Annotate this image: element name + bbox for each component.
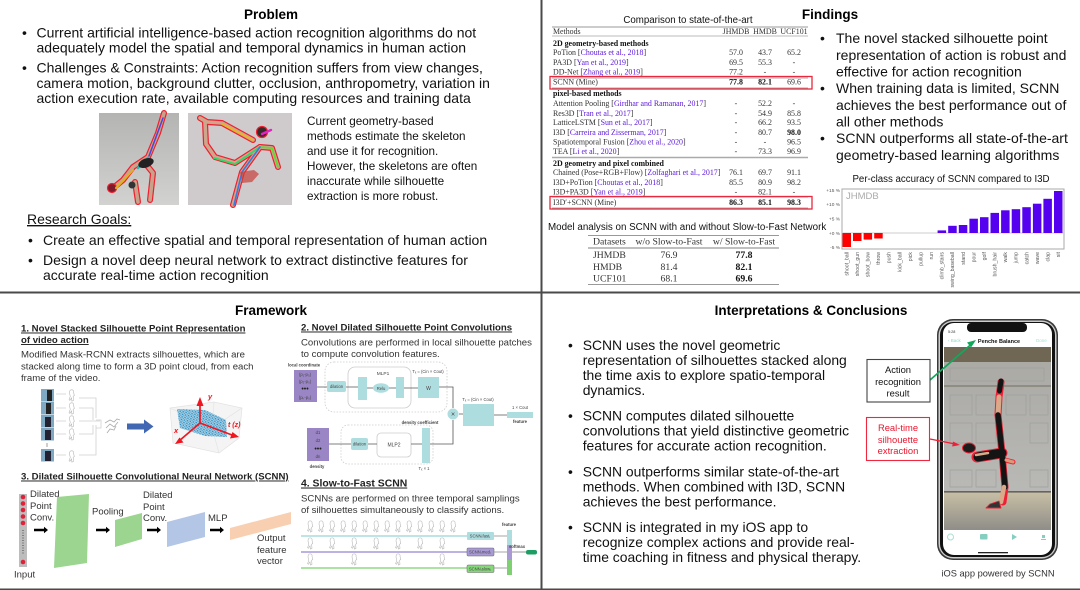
SCNN classifier blocks: feature	[502, 522, 517, 527]
section 4: slow-to-fast SCNN: of silhouettes simultaneously to classify actions.	[301, 505, 504, 516]
dancer with silhouette outline	[962, 381, 1013, 508]
bar chart: per-class accuracy: push	[887, 252, 893, 263]
highlight: SCNN row	[550, 76, 812, 89]
table: comparison to state-of-the-art: 80.9	[758, 178, 772, 187]
table: comparison to state-of-the-art: 96.9	[787, 147, 801, 156]
input points column: Input	[14, 570, 35, 580]
table: comparison to state-of-the-art: -	[735, 138, 738, 146]
convolution diagram: d2	[316, 438, 321, 443]
text block: conclusions bullets: SCNN outperforms similar state-of-the-art	[583, 464, 839, 480]
text block: skeleton note: extraction is more robust.	[307, 190, 438, 203]
text block: conclusions bullets: •	[568, 337, 573, 353]
section 3: SCNN architecture: Dilated	[30, 489, 60, 500]
section 3: SCNN architecture	[14, 472, 291, 580]
table: comparison to state-of-the-art: 93.5	[787, 118, 801, 127]
table: comparison to state-of-the-art: 80.7	[758, 128, 772, 137]
convolution diagram: density coefficient	[402, 420, 439, 425]
table: model analysis: 76.9	[661, 250, 678, 261]
convolution diagram	[288, 362, 533, 471]
table: comparison to state-of-the-art: 98.0	[787, 128, 801, 137]
phone header: Done	[1036, 338, 1047, 343]
text block: skeleton note	[307, 115, 477, 203]
bar chart: per-class accuracy: walk	[1003, 252, 1009, 262]
caption: iOS app: iOS app powered by SCNN	[941, 568, 1055, 578]
table: comparison to state-of-the-art: HMDB	[753, 27, 777, 36]
section 4: slow-to-fast SCNN: 4. Slow-to-Fast SCNN	[301, 478, 407, 490]
layer: dilated point conv 1	[54, 494, 89, 568]
text block: research goals bullets: •	[28, 252, 33, 268]
table: model analysis: Model analysis on SCNN with and without Slow-to-Fast Network	[548, 222, 826, 233]
heading: interpretations and conclusions: Interpretations & Conclusions	[715, 303, 907, 318]
section 3: SCNN architecture: MLP	[208, 513, 228, 524]
text block: research goals bullets: Design a novel deep neural network to extract distinctive features for	[43, 252, 468, 268]
convolution diagram: Tₓ = (Cin × Cout)	[412, 369, 444, 374]
text block: research goals bullets: Create an effective spatial and temporal representation of human action	[43, 232, 487, 248]
table: model analysis: HMDB	[593, 262, 622, 273]
arrow	[210, 527, 224, 533]
text block: skeleton note: Current geometry-based	[307, 115, 434, 128]
text block: problem bullets: •	[22, 24, 27, 40]
table: comparison to state-of-the-art: 91.1	[787, 168, 801, 177]
layer: pooling	[115, 513, 142, 547]
table: comparison to state-of-the-art: 76.1	[729, 168, 743, 177]
bar chart: per-class accuracy: pullup	[918, 252, 924, 266]
table: comparison to state-of-the-art: 82.1	[758, 78, 772, 86]
text block: conclusions bullets: •	[568, 464, 573, 480]
table: model analysis: w/o Slow-to-Fast	[635, 236, 703, 248]
table: comparison to state-of-the-art: 69.5	[729, 58, 743, 67]
table: comparison to state-of-the-art: I3D′+SCNN (Mine)	[553, 198, 617, 207]
arrow	[96, 527, 110, 533]
section 4: slow-to-fast SCNN: SCNNs are performed on three temporal samplings	[301, 494, 520, 504]
panel: interpretations and conclusions	[568, 303, 1058, 578]
table: comparison to state-of-the-art: -	[735, 99, 738, 108]
bar chart: per-class accuracy: shoot_ball	[844, 252, 850, 276]
image: gymnast silhouette 2	[188, 113, 292, 205]
text block: conclusions bullets: representation of silhouettes stacked along	[583, 352, 847, 368]
temporal stream: fast	[301, 521, 467, 536]
arrow: action recognition to header	[930, 340, 976, 380]
table: comparison to state-of-the-art: 96.5	[787, 138, 801, 146]
table: comparison to state-of-the-art: -	[735, 128, 738, 137]
table: comparison to state-of-the-art: 69.6	[787, 78, 801, 86]
table: comparison to state-of-the-art: Chained (Pose+RGB+Flow) [Zolfaghari et al., 2017]	[553, 168, 721, 177]
convolution diagram: dilation	[353, 442, 367, 446]
garage door photo	[944, 347, 1051, 530]
text block: conclusions bullets: the time axis to explore spatio-temporal	[583, 367, 825, 383]
bar chart: per-class accuracy: clap	[1045, 252, 1051, 262]
phone toolbar	[948, 534, 1046, 540]
convolution diagram: W	[426, 386, 431, 392]
bar chart: per-class accuracy: brush_hair	[992, 252, 998, 277]
convolution diagram: (pₖ-p₀)	[299, 395, 312, 400]
text block: findings bullets: The novel stacked silhouette point	[836, 30, 1048, 46]
table: comparison to state-of-the-art: -	[793, 99, 796, 108]
table: comparison to state-of-the-art: 2D geometry and pixel combined	[553, 159, 665, 168]
convolution diagram: Tₓ = (Cin × Cout)	[462, 397, 494, 402]
bar chart: per-class accuracy: -5 %	[830, 245, 841, 251]
table: comparison to state-of-the-art: -	[735, 188, 738, 196]
table: comparison to state-of-the-art: UCF101	[780, 27, 808, 36]
table: comparison to state-of-the-art: 86.3	[729, 198, 743, 207]
table: comparison to state-of-the-art: 98.2	[787, 178, 801, 187]
bar chart: per-class accuracy	[826, 174, 1064, 287]
arrow: silhouette extraction to dancer	[930, 439, 960, 446]
bar chart: per-class accuracy: sit	[1056, 251, 1062, 257]
chart: 3D point cloud	[170, 392, 242, 453]
bar chart: per-class accuracy: jump	[1014, 252, 1020, 264]
table: comparison to state-of-the-art: 98.3	[787, 198, 801, 207]
callout: action recognition result: Action	[885, 364, 911, 375]
table: model analysis: Datasets	[593, 236, 626, 248]
text block: findings bullets: •	[820, 30, 825, 46]
table: comparison to state-of-the-art: 54.9	[758, 109, 772, 118]
table: comparison to state-of-the-art: 66.2	[758, 118, 772, 127]
bar chart: per-class accuracy: JHMDB	[846, 191, 879, 202]
section 4: slow-to-fast SCNN	[301, 478, 537, 575]
table: comparison to state-of-the-art: -	[735, 118, 738, 127]
table: comparison to state-of-the-art: -	[764, 68, 767, 76]
table: comparison to state-of-the-art: 85.8	[787, 109, 801, 118]
section 3: SCNN architecture: Point	[30, 501, 52, 512]
table: comparison to state-of-the-art: 73.3	[758, 147, 772, 156]
section 1: stacked silhouette point representation: of video action	[21, 335, 89, 346]
bar chart: per-class accuracy: pick	[908, 252, 914, 261]
section 3: SCNN architecture: Output	[257, 533, 286, 544]
text block: findings bullets: effective for action recognition	[836, 64, 1022, 80]
text block: findings bullets	[820, 30, 1068, 163]
SCNN classifier blocks: SCNN₍med₎	[469, 550, 491, 554]
text block: skeleton note: inaccurate while silhouette	[307, 175, 444, 188]
image: gymnast silhouette 1	[99, 113, 179, 205]
phone header: Penche Balance	[978, 339, 1020, 345]
convolution diagram: density	[310, 464, 325, 469]
text block: problem bullets: Challenges & Constraints: Action recognition suffers from view changes,	[36, 60, 483, 76]
heading: problem: Problem	[244, 7, 298, 22]
section 2: dilated silhouette point convolutions: Convolutions are performed in local silhouette patches	[301, 338, 532, 348]
text block: conclusions bullets: SCNN is integrated in my iOS app to	[583, 519, 808, 535]
silhouette stacking flow	[56, 390, 120, 462]
highlight: I3D+SCNN row	[550, 196, 812, 209]
convolution diagram: •••	[314, 446, 322, 453]
table: comparison to state-of-the-art: 65.2	[787, 48, 801, 57]
convolution diagram: feature	[513, 419, 528, 424]
section 3: SCNN architecture: feature	[257, 545, 287, 556]
text block: findings bullets: all other methods	[836, 114, 943, 130]
table: comparison to state-of-the-art: -	[793, 188, 796, 196]
callout: action recognition result: recognition	[875, 376, 921, 387]
table: model analysis: w/ Slow-to-Fast	[713, 236, 775, 248]
text block: conclusions bullets: achieves the best performance.	[583, 494, 777, 510]
table: comparison to state-of-the-art: TEA [Li et al., 2020]	[553, 147, 620, 156]
table: comparison to state-of-the-art: 85.1	[758, 198, 772, 207]
text block: problem bullets: adequately model the spatial and temporal dynamics in human action	[36, 39, 466, 55]
bar chart: per-class accuracy: swing_baseball	[950, 252, 956, 287]
convolution diagram: Relu	[377, 386, 386, 391]
text block: findings bullets: •	[820, 130, 825, 146]
phone header: 5:28	[948, 330, 955, 334]
text block: skeleton note: However, the skeletons are often	[307, 160, 477, 173]
chart: 3D point cloud: t (z)	[228, 422, 241, 429]
section 2: dilated silhouette point convolutions: 2. Novel Dilated Silhouette Point Convolutions	[301, 322, 512, 334]
section 1: stacked silhouette point representation	[21, 324, 254, 462]
table: model analysis: 77.8	[736, 250, 753, 261]
table: model analysis	[548, 222, 826, 284]
text block: findings bullets: When training data is limited, SCNN	[836, 80, 1059, 96]
table: comparison to state-of-the-art: LatticeLSTM [Sun et al., 2017]	[553, 118, 653, 127]
video frames	[41, 389, 54, 462]
bar chart: per-class accuracy: +15 %	[826, 188, 841, 194]
table: model analysis: JHMDB	[593, 250, 626, 261]
phone header: ‹ Back	[948, 338, 962, 343]
text block: problem bullets: •	[22, 60, 27, 76]
section 2: dilated silhouette point convolutions	[288, 322, 533, 471]
text block: problem bullets: camera motion, background clutter, occlusion, anthropometry, variation in	[36, 75, 490, 91]
temporal stream: medium	[301, 538, 467, 552]
convolution diagram: dn	[316, 454, 321, 459]
convolution diagram: MLP2	[387, 442, 401, 448]
layer: dilated point conv 2	[167, 512, 205, 547]
chart: 3D point cloud: x	[173, 426, 179, 435]
callout: real-time silhouette extraction: extraction	[878, 445, 918, 456]
bar chart: per-class accuracy: shoot_bow	[866, 252, 872, 277]
convolution diagram: d1	[316, 430, 321, 435]
text block: findings bullets: geometry-based learning algorithms	[836, 147, 1059, 163]
table: comparison to state-of-the-art: PoTion [Choutas et al., 2018]	[553, 48, 646, 57]
bar chart: per-class accuracy: throw	[876, 252, 882, 265]
callout: action recognition result: result	[887, 388, 910, 398]
text block: conclusions bullets: •	[568, 519, 573, 535]
bar chart: per-class accuracy: run	[929, 252, 935, 260]
text block: findings bullets: SCNN outperforms all state-of-the-art	[836, 130, 1068, 146]
heading: findings: Findings	[802, 7, 858, 22]
convolution diagram: local coordinate	[288, 362, 321, 368]
section 3: SCNN architecture: 3. Dilated Silhouette Convolutional Neural Network (SCNN)	[21, 472, 289, 482]
section 3: SCNN architecture: Pooling	[92, 506, 124, 518]
bar chart: per-class accuracy: wave	[1035, 252, 1041, 264]
bar chart: per-class accuracy: pour	[971, 252, 977, 262]
convolution diagram: dilation	[330, 384, 344, 389]
table: comparison to state-of-the-art: Spatiotemporal Fusion [Zhou et al., 2020]	[553, 138, 686, 146]
bar chart: per-class accuracy: Per-class accuracy of SCNN compared to I3D	[852, 174, 1050, 185]
callout: real-time silhouette extraction	[866, 418, 930, 460]
table: comparison to state-of-the-art	[550, 15, 812, 209]
panel: problem	[22, 7, 490, 283]
text block: skeleton note: methods estimate the skeleton	[307, 130, 466, 143]
convolution diagram: Tₓ × 1	[418, 466, 430, 471]
arrow: to point cloud	[127, 420, 154, 434]
table: comparison to state-of-the-art: -	[764, 138, 767, 146]
section 1: stacked silhouette point representation: frame of the video.	[21, 373, 100, 384]
bar chart: per-class accuracy: golf	[982, 251, 988, 260]
text block: findings bullets: •	[820, 80, 825, 96]
phone header	[948, 330, 1047, 345]
temporal stream: slow	[301, 554, 467, 568]
callout: action recognition result	[867, 360, 930, 402]
text block: problem bullets: action execution rate, available computing resources and training data	[36, 90, 471, 106]
text block: conclusions bullets: •	[568, 408, 573, 424]
table: comparison to state-of-the-art: 82.1	[758, 188, 772, 196]
table: comparison to state-of-the-art: Attention Pooling [Girdhar and Ramanan, 2017]	[553, 99, 706, 108]
SCNN classifier blocks	[467, 522, 537, 575]
text block: conclusions bullets: recognize complex actions and provide real-	[583, 534, 855, 550]
table: comparison to state-of-the-art: JHMDB	[723, 27, 749, 36]
convolution diagram: MLP1	[377, 371, 390, 377]
text block: conclusions bullets: convolutions that yield distinctive geometric	[583, 422, 849, 438]
text block: research goals bullets: accurate real-time action recognition	[43, 267, 269, 283]
arrow	[34, 527, 48, 533]
table: comparison to state-of-the-art: I3D+PA3D [Yan et al., 2019]	[553, 188, 646, 196]
text block: conclusions bullets: methods. When combined with I3D, SCNN	[583, 478, 845, 494]
section 3: SCNN architecture: Conv.	[30, 512, 54, 524]
table: comparison to state-of-the-art: DD-Net [Zhang et al., 2019]	[553, 68, 643, 76]
convolution diagram: (p₂-p₀)	[299, 379, 312, 384]
bar chart: per-class accuracy: +10 %	[826, 202, 841, 208]
table: comparison to state-of-the-art: pixel-based methods	[553, 89, 622, 98]
heading: framework: Framework	[235, 303, 308, 318]
table: comparison to state-of-the-art: 2D geometry-based methods	[553, 39, 649, 48]
text block: findings bullets: representation of action is robust and	[836, 47, 1066, 63]
convolution diagram: •••	[301, 386, 309, 393]
bar chart: per-class accuracy: stand	[961, 252, 967, 265]
table: comparison to state-of-the-art: Methods	[553, 27, 581, 36]
text block: conclusions bullets: time coaching in fitness and physical therapy.	[583, 549, 861, 565]
text block: conclusions bullets: SCNN uses the novel geometric	[583, 337, 780, 353]
convolution diagram: 1 × Cout	[512, 405, 529, 410]
table: comparison to state-of-the-art: PA3D [Yan et al., 2019]	[553, 58, 629, 67]
table: model analysis: 82.1	[736, 262, 753, 273]
table: comparison to state-of-the-art: 57.0	[729, 48, 743, 57]
section 3: SCNN architecture: Conv.	[143, 513, 167, 524]
heading: research goals: Research Goals:	[27, 211, 131, 227]
table: comparison to state-of-the-art: SCNN (Mine)	[553, 78, 598, 86]
table: comparison to state-of-the-art: 69.7	[758, 168, 772, 177]
bar chart: per-class accuracy: shoot_gun	[855, 252, 861, 276]
text block: findings bullets: achieves the best performance out of	[836, 97, 1066, 113]
SCNN classifier blocks: SCNN₍slow₎	[469, 566, 491, 572]
layer: output feature vector	[230, 512, 291, 540]
table: comparison to state-of-the-art: 77.2	[729, 68, 743, 76]
section 1: stacked silhouette point representation: 1. Novel Stacked Silhouette Point Representation	[21, 324, 246, 334]
image: iOS phone app	[937, 319, 1058, 560]
bar chart: per-class accuracy: catch	[1024, 252, 1030, 264]
text block: conclusions bullets: dynamics.	[583, 382, 645, 398]
table: model analysis: 69.6	[736, 274, 753, 284]
table: comparison to state-of-the-art: 43.7	[758, 48, 772, 57]
table: comparison to state-of-the-art: -	[793, 68, 796, 76]
text block: research goals bullets	[28, 232, 487, 283]
chart: 3D point cloud: y	[207, 392, 213, 401]
text block: research goals bullets: •	[28, 232, 33, 248]
table: comparison to state-of-the-art: 85.5	[729, 178, 743, 187]
panel: findings	[548, 7, 1068, 287]
input points column	[14, 494, 35, 580]
table: model analysis: 81.4	[661, 262, 678, 273]
table: comparison to state-of-the-art: I3D [Carreira and Zisserman, 2017]	[553, 128, 667, 137]
SCNN classifier blocks: SCNN₍fast₎	[470, 534, 490, 538]
table: comparison to state-of-the-art: Comparison to state-of-the-art	[623, 15, 753, 26]
section 3: SCNN architecture: Dilated	[143, 490, 173, 501]
convolution diagram: (p₁-p₀)	[299, 372, 312, 377]
table: comparison to state-of-the-art: -	[735, 147, 738, 156]
bar chart: per-class accuracy: +0 %	[829, 231, 841, 237]
table: comparison to state-of-the-art: 55.3	[758, 58, 772, 67]
text block: conclusions bullets: features for accurate action recognition.	[583, 438, 827, 454]
text block: problem bullets: Current artificial intelligence-based action recognition algorithms do not	[36, 24, 476, 40]
callout: real-time silhouette extraction: silhouette	[878, 434, 918, 445]
SCNN classifier blocks: softmax	[509, 544, 526, 549]
convolution diagram: ×	[451, 412, 455, 418]
table: model analysis: UCF101	[593, 274, 627, 284]
bar chart: per-class accuracy: kick_ball	[897, 252, 903, 272]
table: comparison to state-of-the-art: Res3D [Tran et al., 2017]	[553, 109, 634, 118]
text block: problem bullets	[22, 24, 490, 106]
table: model analysis: 68.1	[661, 274, 678, 284]
table: comparison to state-of-the-art: 52.2	[758, 99, 772, 108]
bar chart: per-class accuracy: +5 %	[829, 216, 841, 222]
section 1: stacked silhouette point representation: stacked along time to form a 3D point cloud, from each	[21, 362, 254, 372]
text block: skeleton note: and use it for recognition.	[307, 145, 438, 158]
section 2: dilated silhouette point convolutions: to compute convolution features.	[301, 349, 440, 360]
section 1: stacked silhouette point representation: Modified Mask-RCNN extracts silhouettes, which are	[21, 350, 245, 360]
section 3: SCNN architecture: vector	[257, 556, 283, 567]
table: comparison to state-of-the-art: -	[793, 58, 796, 67]
panel: framework	[14, 303, 537, 580]
text block: conclusions bullets	[568, 337, 861, 565]
arrow	[147, 527, 161, 533]
table: comparison to state-of-the-art: I3D+PoTion [Choutas et al., 2018]	[553, 178, 663, 187]
table: comparison to state-of-the-art: 77.8	[729, 78, 743, 86]
bar chart: per-class accuracy: climb_stairs	[940, 252, 946, 279]
section 3: SCNN architecture: Point	[143, 502, 165, 513]
callout: real-time silhouette extraction: Real-time	[878, 422, 918, 433]
phone notch and status	[967, 323, 1027, 332]
text block: conclusions bullets: SCNN computes dilated silhouette	[583, 408, 795, 424]
table: comparison to state-of-the-art: -	[735, 109, 738, 118]
